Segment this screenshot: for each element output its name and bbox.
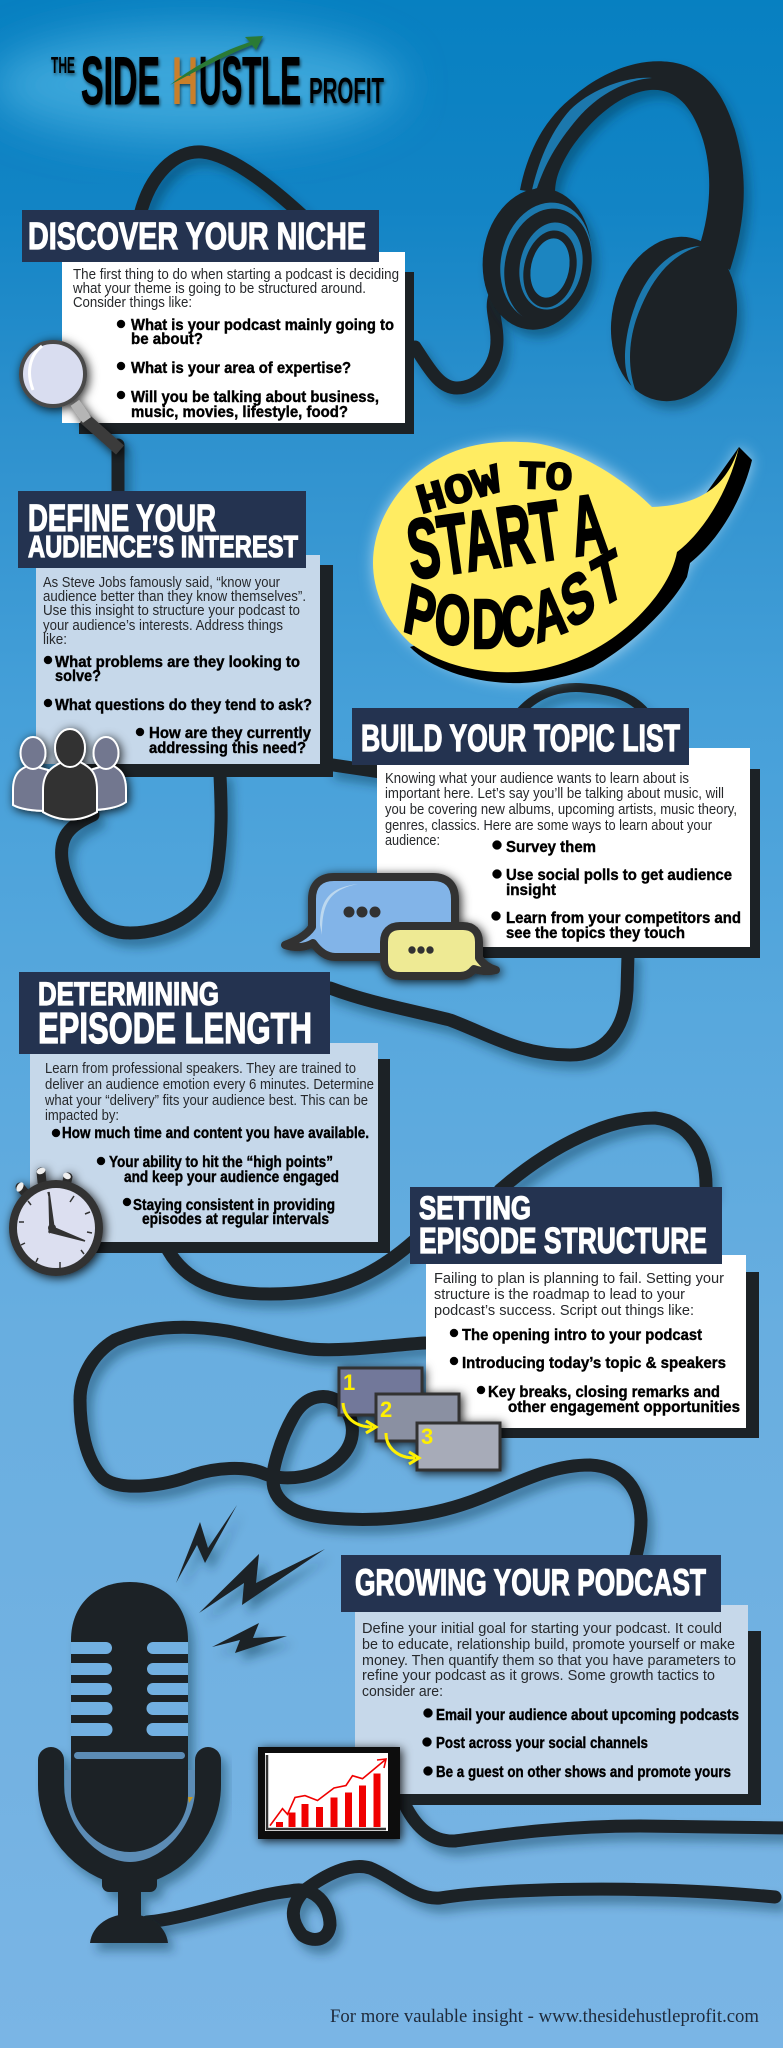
bullets: topic tactics: see the topics they touch <box>506 925 685 942</box>
text block: structure intro: Failing to plan is planning to fail. Setting your <box>434 1270 724 1287</box>
bullets: audience questions: How are they currently <box>149 725 311 742</box>
bullets: discover questions: Will you be talking about business, <box>131 389 379 406</box>
icon: magnifying glass <box>21 342 120 450</box>
text block: topic intro <box>385 770 737 849</box>
heading: setting episode structure: SETTING <box>419 1190 531 1226</box>
text block: episode length intro: Learn from professional speakers. They are trained to <box>45 1060 356 1077</box>
text block: growth intro: consider are: <box>362 1683 443 1700</box>
bullets: audience questions: solve? <box>55 668 101 685</box>
logo: PROFIT <box>309 70 384 111</box>
bullets: audience questions: What problems are they looking to <box>55 654 300 671</box>
icon: audience people <box>13 729 126 820</box>
bullets: discover questions: What is your podcast mainly going to <box>131 317 394 334</box>
text block: audience intro: like: <box>43 631 67 648</box>
bullets: topic tactics: Learn from your competitors and <box>506 910 741 927</box>
icon: numbered slides <box>339 1368 500 1470</box>
bullets: discover questions: be about? <box>131 331 203 348</box>
panel: build your topic list <box>352 708 760 958</box>
heading: determining episode length: EPISODE LENGTH <box>38 1004 312 1053</box>
bullets: episode length factors: Staying consistent in providing <box>133 1197 335 1214</box>
bullets: discover questions <box>117 317 394 421</box>
bullets: structure items: Key breaks, closing remarks and <box>488 1384 720 1401</box>
headphones <box>474 61 752 413</box>
bullets: topic tactics: Survey them <box>506 839 596 856</box>
panel: define your audience's interest <box>18 491 333 777</box>
logo: SIDE <box>81 43 160 119</box>
text block: discover intro: The first thing to do when starting a podcast is deciding <box>73 266 399 283</box>
text block: episode length intro: what your “delivery” fits your audience best. This can be <box>44 1092 368 1109</box>
bullets: episode length factors: and keep your audience engaged <box>124 1169 339 1186</box>
heading: determining episode length: DETERMINING <box>38 976 219 1012</box>
icon: chat bubbles <box>285 877 496 976</box>
panel: growing your podcast <box>341 1555 761 1805</box>
text block: audience intro: As Steve Jobs famously said, “know your <box>43 574 280 591</box>
logo: H <box>172 43 198 119</box>
icon: numbered slides: 1 <box>343 1370 355 1395</box>
bullets: growth tactics: Post across your social channels <box>436 1735 648 1752</box>
speech bubble title: how to start a podcast: START A <box>401 476 612 597</box>
heading: define your audience's interest: AUDIENCE’S INTEREST <box>28 529 298 564</box>
bullets: episode length factors: episodes at regular intervals <box>142 1211 329 1228</box>
text block: growth intro: refine your podcast as it grows. Some growth tactics to <box>362 1667 715 1684</box>
speech bubble title: how to start a podcast <box>373 442 752 683</box>
bullets: discover questions: music, movies, lifestyle, food? <box>131 404 348 421</box>
bullets: episode length factors <box>52 1125 369 1228</box>
text block: growth intro: Define your initial goal for starting your podcast. It could <box>362 1620 722 1637</box>
text block: topic intro: important here. Let’s say you’ll be talking about music, will <box>385 785 724 802</box>
panel: discover your niche <box>22 210 414 434</box>
bullets: audience questions: What questions do they tend to ask? <box>55 697 312 714</box>
bullets: growth tactics: Be a guest on other shows and promote yours <box>436 1764 731 1781</box>
text block: audience intro <box>43 574 306 648</box>
bullets: topic tactics: insight <box>506 882 557 899</box>
text block: topic intro: you be covering new albums, upcoming artists, music theory, <box>385 801 737 818</box>
bullets: discover questions: What is your area of expertise? <box>131 360 351 377</box>
text block: audience intro: your audience’s interests. Address things <box>43 617 283 634</box>
speech bubble title: how to start a podcast: PODCAST <box>399 534 629 663</box>
icon: numbered slides: 3 <box>421 1424 433 1449</box>
heading: determining episode length <box>38 976 312 1053</box>
text block: episode length intro: deliver an audience emotion every 6 minutes. Determine <box>45 1076 374 1093</box>
panel: determining episode length <box>19 972 390 1253</box>
bullets: episode length factors: How much time and content you have available. <box>62 1125 369 1142</box>
icon: growth chart <box>258 1747 400 1839</box>
bullets: audience questions <box>44 654 312 757</box>
text block: topic intro: genres, classics. Here are some ways to learn about your <box>385 817 712 834</box>
text block: topic intro: audience: <box>385 832 440 849</box>
bullets: topic tactics: Use social polls to get audience <box>506 867 732 884</box>
text block: structure intro <box>434 1270 724 1319</box>
footer: website credit: For more vaulable insight - www.thesidehustleprofit.com <box>330 2006 759 2027</box>
bullets: structure items: The opening intro to your podcast <box>462 1327 703 1344</box>
text block: audience intro: Use this insight to structure your podcast to <box>43 602 300 619</box>
text block: discover intro <box>72 266 399 311</box>
icon: microphone <box>51 1582 208 1943</box>
heading: define your audience's interest: DEFINE YOUR <box>28 498 216 540</box>
icon: stopwatch <box>13 1167 99 1272</box>
text block: growth intro <box>362 1620 736 1700</box>
speech bubble title: how to start a podcast: TO <box>518 456 573 503</box>
text block: topic intro: Knowing what your audience wants to learn about is <box>385 770 689 787</box>
bullets: audience questions: addressing this need? <box>149 740 306 757</box>
text block: growth intro: money. Then quantify them so that you have parameters to <box>362 1652 736 1669</box>
text block: episode length intro <box>44 1060 374 1124</box>
text block: structure intro: structure is the roadmap to lead to your <box>434 1286 685 1303</box>
bullets: structure items: other engagement opportunities <box>508 1399 740 1416</box>
text block: discover intro: Consider things like: <box>73 294 192 311</box>
text block: episode length intro: impacted by: <box>45 1107 119 1124</box>
text block: structure intro: podcast’s success. Script out things like: <box>434 1302 694 1319</box>
heading: define your audience's interest <box>28 498 298 564</box>
bullets: structure items <box>450 1327 740 1416</box>
bullets: episode length factors: Your ability to hit the “high points” <box>109 1154 333 1171</box>
bullets: growth tactics <box>422 1707 739 1781</box>
text block: discover intro: what your theme is going to be structured around. <box>72 280 366 297</box>
bullets: structure items: Introducing today’s topic & speakers <box>462 1355 726 1372</box>
logo: USTLE <box>199 43 301 119</box>
panel: setting episode structure <box>410 1187 759 1438</box>
logo: THE <box>51 52 75 78</box>
logo <box>51 36 384 119</box>
text block: growth intro: be to educate, relationship build, promote yourself or make <box>362 1636 735 1653</box>
bullets: topic tactics <box>492 839 741 942</box>
icon: lightning bolts <box>176 1505 325 1653</box>
text block: audience intro: audience better than they know themselves”. <box>43 588 306 605</box>
speech bubble title: how to start a podcast: HOW <box>411 456 508 526</box>
icon: numbered slides: 2 <box>380 1397 392 1422</box>
heading: setting episode structure <box>419 1190 707 1261</box>
heading: discover your niche: DISCOVER YOUR NICHE <box>28 216 366 258</box>
